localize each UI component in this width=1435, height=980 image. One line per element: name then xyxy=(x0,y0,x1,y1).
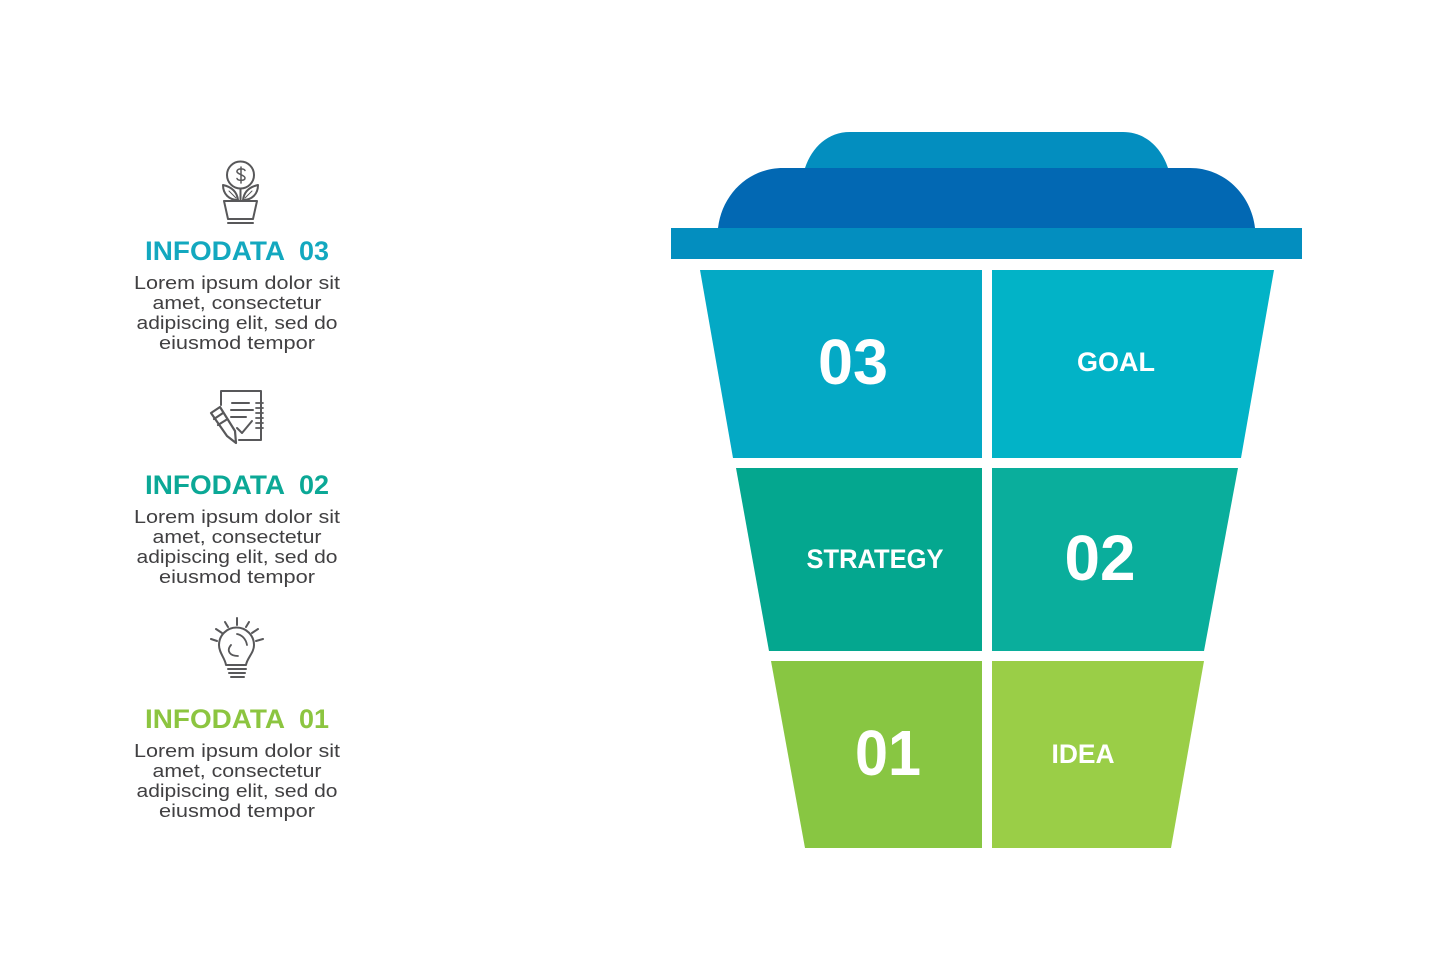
text block: infodata 03 description: Lorem ipsum dolor sit xyxy=(134,272,340,293)
cup panel: goal xyxy=(992,270,1274,458)
heading: infodata 01: INFODATA xyxy=(145,704,285,734)
text block: infodata 02 description: Lorem ipsum dolor sit xyxy=(134,506,340,527)
heading: infodata 01: 01 xyxy=(299,704,329,734)
cup panel: 01: 01 xyxy=(855,717,921,789)
cup panel: 01 xyxy=(771,661,982,848)
heading: infodata 03: INFODATA xyxy=(145,236,285,266)
cup panel: 02 xyxy=(992,468,1238,651)
cup panel: goal: GOAL xyxy=(1077,347,1155,377)
cup panel: 03 xyxy=(700,270,982,458)
heading: infodata 02: INFODATA xyxy=(145,470,285,500)
text block: infodata 01 description xyxy=(134,740,340,821)
icon: plant with dollar coin xyxy=(223,162,258,223)
text block: infodata 01 description: Lorem ipsum dolor sit xyxy=(134,740,340,761)
text block: infodata 03 description xyxy=(134,272,340,353)
text block: infodata 03 description: adipiscing elit, sed do xyxy=(136,312,338,333)
text block: infodata 01 description: adipiscing elit, sed do xyxy=(136,780,338,801)
icon: document with pen xyxy=(211,391,263,443)
text block: infodata 01 description: amet, consectetur xyxy=(152,760,322,781)
text block: infodata 02 description: amet, consectetur xyxy=(152,526,322,547)
cup panel: 02: 02 xyxy=(1064,522,1136,594)
heading: infodata 02: 02 xyxy=(299,470,329,500)
cup panel: idea xyxy=(992,661,1204,848)
text block: infodata 03 description: amet, consectetur xyxy=(152,292,322,313)
text block: infodata 02 description: eiusmod tempor xyxy=(159,566,315,587)
cup panel: 03: 03 xyxy=(818,326,888,398)
cup panel: strategy xyxy=(736,468,982,651)
text block: infodata 02 description xyxy=(134,506,340,587)
text block: infodata 02 description: adipiscing elit, sed do xyxy=(136,546,338,567)
lid top xyxy=(805,132,1168,168)
icon: light bulb xyxy=(211,618,263,677)
lid rim xyxy=(671,228,1302,259)
text block: infodata 01 description: eiusmod tempor xyxy=(159,800,315,821)
cup panel: strategy: STRATEGY xyxy=(806,544,944,574)
text block: infodata 03 description: eiusmod tempor xyxy=(159,332,315,353)
cup lid xyxy=(671,132,1302,259)
lid middle xyxy=(718,168,1255,228)
cup panel: idea: IDEA xyxy=(1052,739,1114,769)
heading: infodata 03: 03 xyxy=(299,236,329,266)
